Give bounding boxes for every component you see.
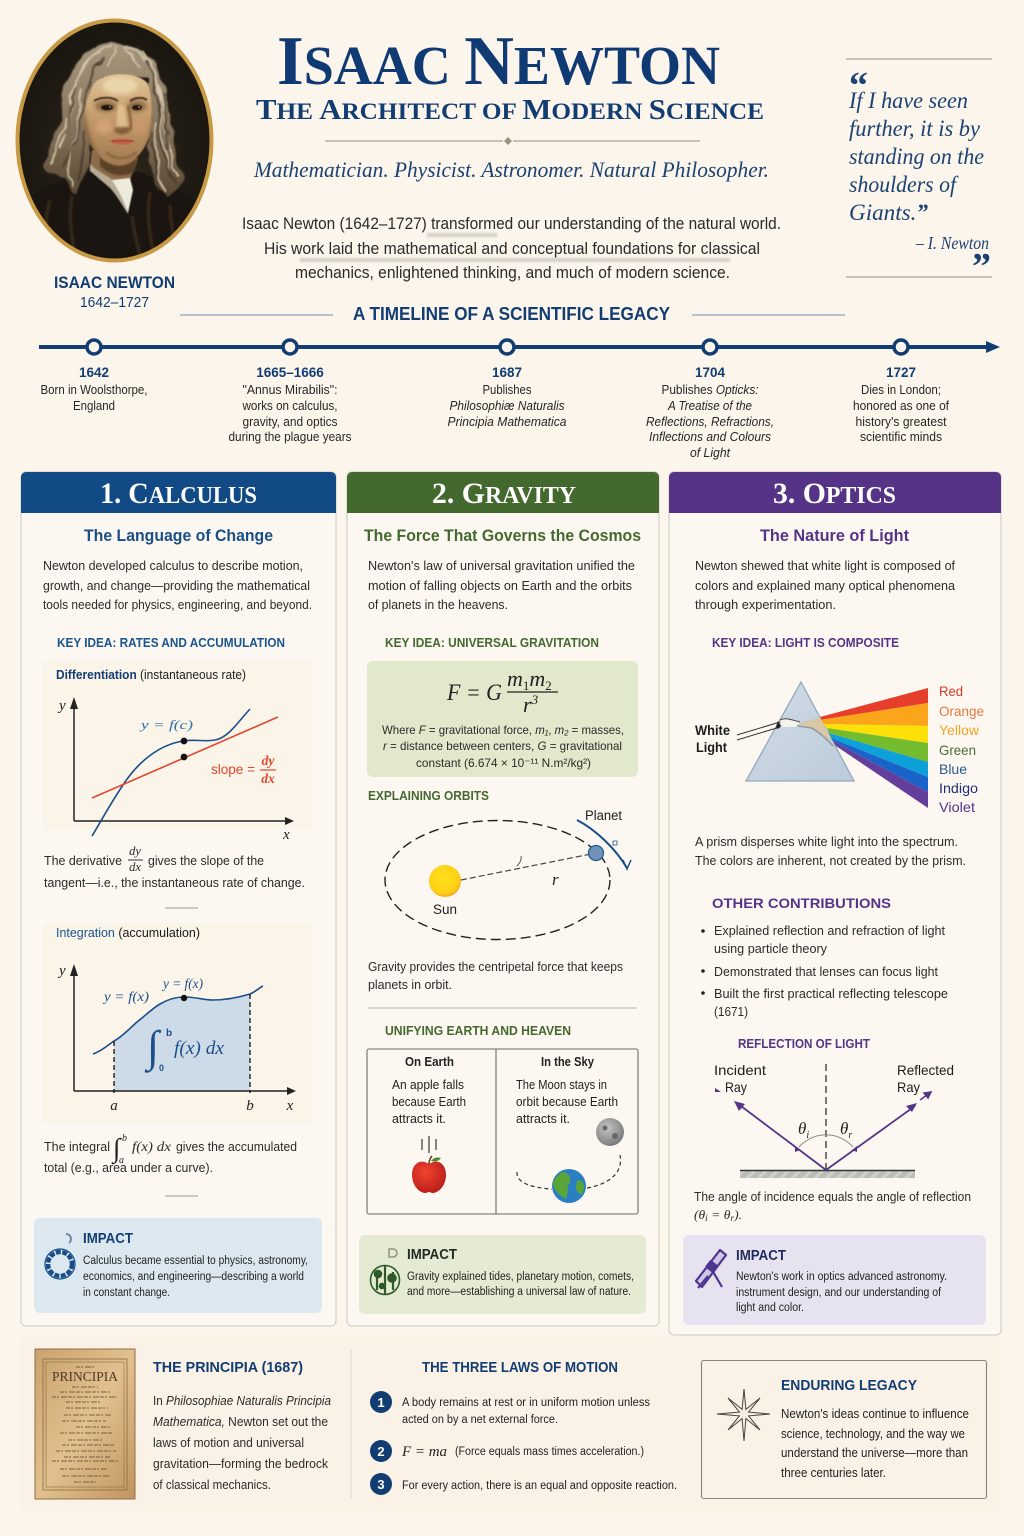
gravity impact box: [359, 1235, 646, 1314]
optics impact box: Newton's work in optics advanced astronomy.: [736, 1271, 947, 1283]
in the sky column: attracts it.: [516, 1112, 570, 1126]
orbit caption: [368, 959, 623, 992]
bottom band: [21, 1336, 1001, 1513]
gravity subheading: The Force That Governs the Cosmos: [364, 526, 641, 545]
gravity intro text: Newton's law of universal gravitation unified the: [368, 558, 635, 573]
reflection diagram: θ: [840, 1119, 848, 1138]
quote block: shoulders of: [849, 172, 959, 197]
panel: optics: [669, 472, 1001, 1335]
law 2: 2: [377, 1444, 385, 1459]
other contributions list: Explained reflection and refraction of light: [714, 923, 945, 938]
other contributions list: (1671): [714, 1004, 748, 1019]
law 1: acted on by a net external force.: [402, 1414, 558, 1426]
calculus intro text: Newton developed calculus to describe motion,: [43, 558, 303, 573]
principia book cover: PRINCIPIA: [52, 1370, 119, 1385]
integral explanation: gives the accumulated: [176, 1139, 297, 1154]
orbit diagram: Sun: [433, 902, 457, 917]
portrait caption: ISAAC NEWTON: [54, 273, 175, 292]
reflection diagram: Reflected: [897, 1062, 954, 1078]
principia text: THE PRINCIPIA (1687): [153, 1359, 303, 1376]
timeline event 1687: Principia Mathematica: [448, 415, 567, 429]
optics subheading: The Nature of Light: [760, 526, 909, 545]
robe: [56, 172, 164, 228]
quote block: – I. Newton: [915, 233, 989, 253]
reflection diagram: Ray: [725, 1079, 747, 1095]
quote block: If I have seen: [848, 88, 968, 113]
optics intro text: colors and explained many optical phenomena: [695, 578, 956, 593]
derivative explanation: dx: [129, 860, 141, 874]
timeline event 1727: history's greatest: [856, 415, 947, 429]
calculus subheading: The Language of Change: [84, 526, 273, 545]
timeline event 1727: [853, 365, 949, 444]
gravitation formula box: r = distance between centers, G = gravitational: [383, 739, 622, 753]
timeline event 1704: [646, 365, 774, 460]
orbit diagram: [385, 808, 631, 940]
gravitation formula box: 1: [523, 678, 529, 693]
principia book cover: [35, 1349, 135, 1499]
other contributions list: Built the first practical reflecting telescope: [714, 986, 948, 1001]
timeline event 1665-1666: works on calculus,: [242, 399, 338, 413]
calculus impact box: economics, and engineering—describing a world: [83, 1271, 304, 1283]
integration chart: b: [246, 1098, 254, 1114]
reflection diagram: Ray: [897, 1079, 920, 1095]
principia text: Mathematica, Newton set out the: [153, 1414, 328, 1429]
in the sky column: The Moon stays in: [516, 1078, 607, 1092]
integration chart: b: [166, 1028, 172, 1039]
calculus impact box: Calculus became essential to physics, astronomy,: [83, 1255, 308, 1267]
timeline event 1665-1666: during the plague years: [228, 430, 352, 444]
law 2: F = ma: [401, 1444, 447, 1460]
timeline event 1642: England: [73, 399, 115, 413]
icon: apple: [412, 1156, 446, 1193]
integration chart: a: [110, 1098, 118, 1114]
integral explanation: [44, 1133, 297, 1175]
integration chart: [43, 923, 312, 1124]
timeline heading: A TIMELINE OF A SCIENTIFIC LEGACY: [353, 303, 671, 324]
gravitation formula box: Where F = gravitational force, m₁, m₂ = masses,: [382, 723, 624, 737]
optics impact box: IMPACT: [736, 1248, 786, 1264]
timeline event 1704: 1704: [695, 365, 726, 380]
integration chart: y: [57, 963, 66, 979]
reflection diagram: r: [848, 1130, 852, 1141]
principia text: [153, 1359, 331, 1492]
differentiation chart: dx: [261, 771, 275, 786]
derivative explanation: dy: [129, 844, 141, 858]
timeline event 1727: 1727: [886, 365, 916, 380]
principia text: laws of motion and universal: [153, 1435, 304, 1450]
integration chart: Integration (accumulation): [56, 926, 200, 940]
differentiation chart: Differentiation (instantaneous rate): [56, 668, 246, 682]
title: ISAAC NEWTON: [277, 23, 720, 100]
integral explanation: a: [119, 1155, 124, 1166]
timeline event 1704: Reflections, Refractions,: [646, 415, 774, 429]
reflection diagram: [714, 1062, 954, 1178]
quote block: [846, 59, 992, 288]
intro paragraph: Isaac Newton (1642–1727) transformed our understanding of the natural world.: [242, 214, 781, 233]
optics impact box: [683, 1235, 986, 1325]
on earth column: because Earth: [392, 1095, 466, 1109]
title ornament: [325, 137, 700, 145]
integration chart: x: [286, 1098, 294, 1114]
integration chart: 0: [159, 1063, 164, 1073]
timeline event 1665-1666: "Annus Mirabilis":: [242, 383, 338, 397]
orbit caption: Gravity provides the centripetal force that keeps: [368, 959, 623, 974]
panel: calculus: [21, 472, 336, 1326]
differentiation chart: slope =: [211, 762, 255, 777]
enduring legacy box: [702, 1360, 986, 1498]
integration chart: f(x) dx: [174, 1038, 225, 1059]
optics intro text: through experimentation.: [695, 597, 836, 612]
timeline event 1727: scientific minds: [860, 430, 942, 444]
calculus key idea heading: KEY IDEA: RATES AND ACCUMULATION: [57, 635, 285, 650]
calculus impact box: IMPACT: [83, 1231, 133, 1247]
optics intro text: Newton shewed that white light is composed of: [695, 558, 955, 573]
timeline axis: [39, 340, 1000, 354]
gravity intro text: of planets in the heavens.: [368, 597, 508, 612]
principia text: of classical mechanics.: [153, 1477, 271, 1492]
timeline event 1727: honored as one of: [853, 399, 949, 413]
spectrum legend: Blue: [939, 761, 967, 777]
timeline event 1704: A Treatise of the: [667, 399, 752, 413]
optics intro text: [695, 558, 956, 612]
icon: tree globe: [370, 1249, 400, 1294]
intro paragraph: His work laid the mathematical and conceptual foundations for classical: [264, 239, 760, 258]
differentiation chart: dy: [262, 753, 275, 768]
optics header: [669, 472, 1001, 513]
explaining orbits heading: EXPLAINING ORBITS: [368, 788, 489, 803]
optics key idea heading: KEY IDEA: LIGHT IS COMPOSITE: [712, 635, 899, 650]
quote block: “: [849, 65, 868, 107]
optics impact box: instrument design, and our understanding of: [736, 1287, 942, 1299]
optics impact box: light and color.: [736, 1302, 804, 1314]
calculus header: 1. CALCULUS: [100, 477, 257, 510]
prism diagram: White: [695, 722, 730, 738]
quote block: standing on the: [849, 144, 984, 169]
law 2: (Force equals mass times acceleration.): [455, 1446, 644, 1458]
roles line: Mathematician. Physicist. Astronomer. Natural Philosopher.: [253, 157, 769, 182]
timeline event 1642: 1642: [79, 365, 109, 380]
reflection heading: REFLECTION OF LIGHT: [738, 1036, 870, 1051]
spectrum legend: Violet: [939, 799, 975, 815]
prism caption: A prism disperses white light into the spectrum.: [695, 834, 958, 849]
principia text: In Philosophiae Naturalis Principia: [153, 1393, 331, 1408]
timeline event 1687: 1687: [492, 365, 522, 380]
other contributions list: using particle theory: [714, 941, 827, 956]
subtitle: THE ARCHITECT OF MODERN SCIENCE: [256, 95, 764, 126]
prism diagram: [695, 682, 928, 808]
timeline event 1642: Born in Woolsthorpe,: [40, 383, 148, 397]
integral explanation: b: [122, 1133, 127, 1144]
reflection caption: = θ: [708, 1207, 731, 1222]
icon: moon: [596, 1118, 624, 1146]
hair shadow strands: [62, 58, 176, 190]
law 1: 1: [377, 1395, 385, 1410]
gravity header: 2. GRAVITY: [432, 477, 576, 510]
principia text: gravitation—forming the bedrock: [153, 1456, 328, 1471]
intro paragraph: mechanics, enlightened thinking, and much of modern science.: [295, 263, 730, 282]
gravitation formula box: m: [529, 666, 545, 691]
quote block: ”: [972, 246, 991, 288]
spectrum legend: Green: [939, 742, 976, 758]
collar: [90, 164, 128, 214]
enduring legacy box: ENDURING LEGACY: [781, 1377, 917, 1394]
face: [84, 74, 152, 165]
derivative explanation: [44, 844, 305, 890]
spectrum legend: Orange: [939, 703, 984, 719]
orbit caption: planets in orbit.: [368, 977, 452, 992]
calculus intro text: tools needed for physics, engineering, and beyond.: [43, 597, 312, 612]
gravity header: [347, 472, 659, 513]
gravitation formula box: F = G: [446, 680, 502, 705]
integral explanation: total (e.g., area under a curve).: [44, 1160, 213, 1175]
integration chart: ∫: [144, 1022, 162, 1073]
orbit diagram: r: [552, 870, 559, 889]
quote block: Giants.”: [849, 200, 929, 225]
portrait caption: 1642–1727: [80, 295, 149, 311]
timeline event 1704: of Light: [690, 446, 731, 460]
reflection diagram: i: [806, 1130, 809, 1141]
orbit diagram: Planet: [585, 808, 622, 823]
on earth column: On Earth: [405, 1055, 454, 1069]
timeline event 1665-1666: [228, 365, 352, 444]
calculus impact box: in constant change.: [83, 1287, 170, 1299]
calculus impact box: [34, 1218, 322, 1313]
in the sky column: orbit because Earth: [516, 1095, 618, 1109]
gravity impact box: and more—establishing a universal law of nature.: [407, 1286, 631, 1298]
timeline event 1665-1666: 1665–1666: [256, 365, 324, 380]
derivative explanation: gives the slope of the: [148, 853, 264, 868]
gravity key idea heading: KEY IDEA: UNIVERSAL GRAVITATION: [385, 635, 599, 650]
prism diagram: Light: [696, 739, 727, 755]
icon: wreath: [45, 1234, 75, 1279]
gravitation formula box: m: [507, 666, 523, 691]
derivative explanation: The derivative: [44, 853, 122, 868]
gravitation formula box: 2: [545, 678, 552, 693]
intro paragraph: [242, 214, 781, 282]
law 3: [370, 1473, 677, 1495]
integral explanation: ∫: [111, 1133, 122, 1165]
reflection caption: ).: [733, 1207, 742, 1222]
hair highlight strands: [50, 45, 178, 192]
other contributions list: [701, 923, 948, 1019]
spectrum legend: Yellow: [939, 722, 980, 738]
quote block: further, it is by: [849, 116, 981, 141]
in the sky column: [516, 1055, 624, 1203]
law 3: For every action, there is an equal and opposite reaction.: [402, 1480, 677, 1492]
prism caption: [695, 834, 966, 868]
reflection diagram: θ: [798, 1119, 806, 1138]
differentiation chart: y = f(c): [138, 717, 193, 732]
other contributions list: Demonstrated that lenses can focus light: [714, 964, 938, 979]
three laws of motion: [370, 1359, 677, 1495]
gravity impact box: IMPACT: [407, 1247, 457, 1263]
prism caption: The colors are inherent, not created by the prism.: [695, 853, 966, 868]
spectrum legend: Indigo: [939, 780, 978, 796]
enduring legacy box: understand the universe—more than: [781, 1446, 968, 1460]
icon: star: [717, 1389, 770, 1441]
reflection caption: [694, 1189, 971, 1223]
law 3: 3: [377, 1477, 385, 1492]
calculus intro text: [43, 558, 312, 612]
enduring legacy box: science, technology, and the way we: [781, 1427, 965, 1441]
timeline event 1687: Philosophiæ Naturalis: [450, 399, 564, 413]
spectrum legend: Red: [939, 683, 963, 699]
timeline event 1704: Publishes Opticks:: [662, 383, 758, 397]
on earth column: An apple falls: [392, 1078, 464, 1092]
enduring legacy box: three centuries later.: [781, 1466, 886, 1480]
portrait of Isaac Newton: [10, 20, 215, 262]
law 2: [370, 1440, 644, 1462]
gravitation formula box: r: [523, 692, 532, 717]
differentiation chart: [43, 660, 312, 843]
timeline event 1687: Publishes: [482, 383, 532, 397]
integration chart: y = f(x): [161, 977, 203, 992]
optics header: 3. OPTICS: [773, 477, 896, 510]
timeline event 1727: Dies in London;: [861, 383, 941, 397]
reflection caption: r: [730, 1213, 735, 1223]
gravity intro text: motion of falling objects on Earth and the orbits: [368, 578, 632, 593]
spectrum legend: [939, 683, 984, 815]
integral explanation: The integral: [44, 1139, 110, 1154]
icon: telescope: [696, 1250, 726, 1288]
reflection caption: The angle of incidence equals the angle of reflection: [694, 1189, 971, 1204]
reflection diagram: Incident: [714, 1062, 766, 1078]
timeline event 1665-1666: gravity, and optics: [242, 415, 338, 429]
hair mass: [44, 42, 184, 197]
reflection caption: i: [705, 1213, 708, 1223]
panel: gravity: [347, 472, 659, 1326]
timeline event 1704: Inflections and Colours: [649, 430, 771, 444]
integral explanation: f(x) dx: [132, 1139, 171, 1154]
derivative explanation: tangent—i.e., the instantaneous rate of change.: [44, 875, 305, 890]
law 1: A body remains at rest or in uniform motion unless: [402, 1397, 650, 1409]
on earth column: [392, 1055, 466, 1193]
earth and sky comparison table: [367, 1049, 638, 1214]
calculus header: [21, 472, 336, 513]
gravitation formula box: [367, 661, 638, 777]
timeline event 1642: [40, 365, 148, 413]
gravity intro text: [368, 558, 635, 612]
unifying heading: UNIFYING EARTH AND HEAVEN: [385, 1023, 571, 1038]
reflection caption: (θ: [694, 1207, 705, 1222]
calculus intro text: growth, and change—providing the mathematical: [43, 578, 310, 593]
integration chart: y = f(x): [102, 990, 149, 1005]
timeline event 1687: [448, 365, 567, 429]
icon: earth: [552, 1169, 586, 1203]
gravity impact box: Gravity explained tides, planetary motion, comets,: [407, 1271, 634, 1283]
law 1: [370, 1391, 650, 1426]
portrait caption: [54, 273, 175, 311]
on earth column: attracts it.: [392, 1112, 446, 1126]
gravitation formula box: 3: [531, 692, 539, 707]
gravitation formula box: constant (6.674 × 10⁻¹¹ N.m²/kg²): [416, 756, 591, 770]
differentiation chart: x: [282, 827, 290, 843]
three laws of motion: THE THREE LAWS OF MOTION: [422, 1359, 618, 1376]
enduring legacy box: Newton's ideas continue to influence: [781, 1407, 969, 1421]
differentiation chart: y: [57, 698, 66, 714]
in the sky column: In the Sky: [541, 1055, 594, 1069]
neck: [90, 150, 138, 184]
other contributions heading: OTHER CONTRIBUTIONS: [712, 895, 891, 911]
